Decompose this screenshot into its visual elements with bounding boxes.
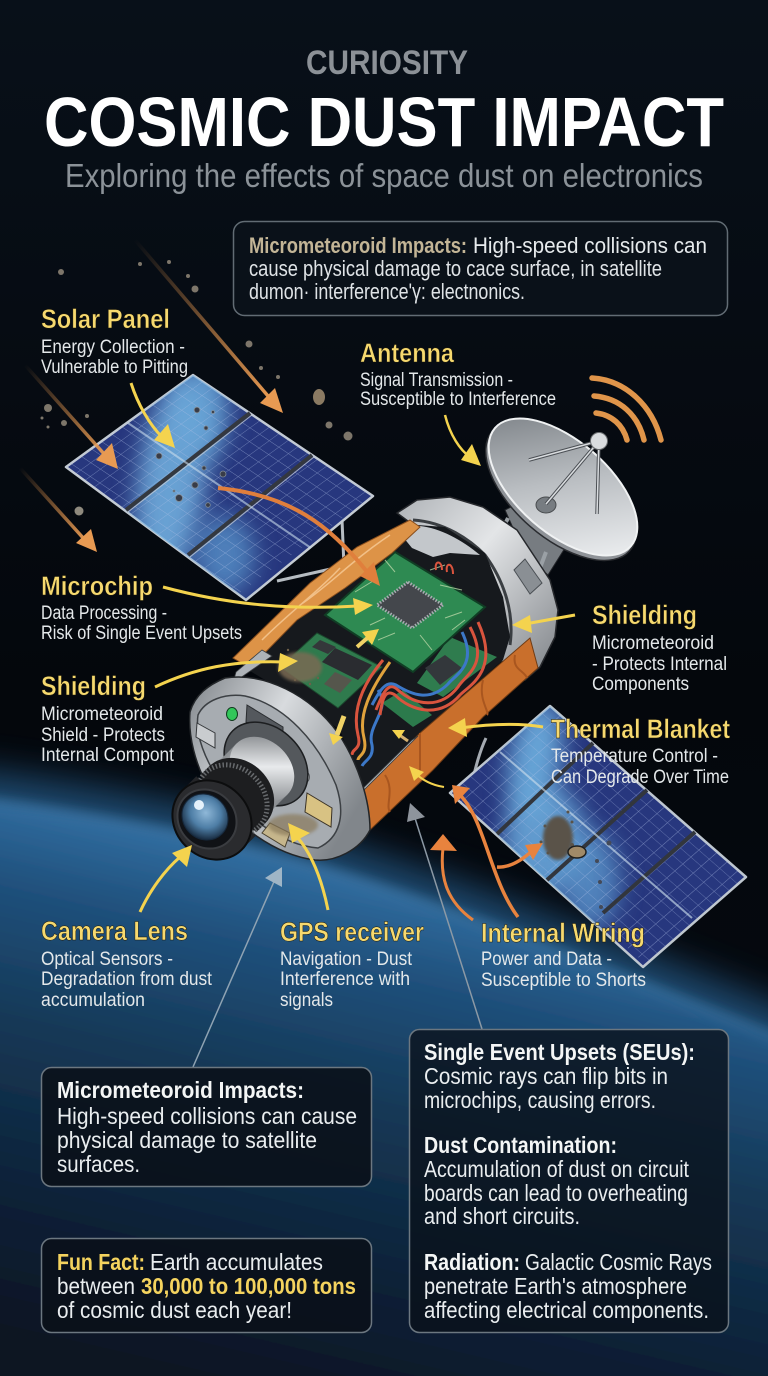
- label: shielding right: Micrometeoroid: [592, 633, 714, 654]
- text: radiation: affecting electrical components.: [424, 1297, 709, 1323]
- arrows: internal wiring: [430, 785, 543, 920]
- thermal blanket: lower panel: [363, 638, 538, 830]
- solar panel: lower right: [450, 696, 746, 967]
- label: gps receiver: Navigation - Dust: [280, 949, 413, 970]
- top callout: micrometeoroid impacts: cause physical damage to cace surface, in satellite: [249, 256, 662, 281]
- label: shielding left: Shielding: [41, 671, 146, 701]
- label: internal wiring: Power and Data -: [481, 949, 612, 970]
- label: antenna: Signal Transmission -: [360, 370, 513, 391]
- subtitle: Exploring the effects of space dust on electronics: [65, 157, 703, 194]
- hatch on ring: [514, 559, 542, 594]
- top callout: micrometeoroid impacts: [234, 222, 728, 316]
- label: gps receiver: Interference with: [280, 969, 410, 990]
- label: internal wiring: Internal Wiring: [481, 918, 645, 948]
- front ring: [190, 677, 370, 860]
- label: thermal blanket: Temperature Control -: [551, 746, 718, 767]
- text: single event upsets: Cosmic rays can flip bits in: [424, 1063, 668, 1089]
- arrow: micrometeoroid box pointer: [193, 867, 282, 1067]
- text: single event upsets: microchips, causing errors.: [424, 1087, 656, 1113]
- rear silver ring: [397, 497, 558, 680]
- metal lip at top of opening: [403, 526, 480, 557]
- metal lip at blanket start: [233, 650, 272, 683]
- text: radiation: [424, 1249, 712, 1323]
- top callout: micrometeoroid impacts: dumon· interference'γ: electnonics.: [249, 279, 525, 304]
- panel: micrometeoroid impacts: surfaces.: [57, 1151, 140, 1177]
- label: antenna: Antenna: [360, 338, 455, 368]
- dust accumulation: [540, 810, 612, 909]
- label: internal wiring: Susceptible to Shorts: [481, 970, 646, 991]
- microchip: [377, 582, 443, 628]
- arrow: solar panel: [131, 383, 175, 448]
- arrow: right box pointer: [407, 803, 482, 1029]
- arrow: shielding left: [155, 653, 298, 687]
- text: radiation: Galactic Cosmic Rays: [525, 1249, 712, 1275]
- silver strip at blanket end: [346, 736, 418, 805]
- face plate: [246, 705, 283, 745]
- arrow: debris diagonal 1: [135, 240, 283, 413]
- main circuit board: [325, 552, 485, 672]
- label: gps receiver: [280, 917, 424, 1011]
- label: antenna: Susceptible to Interference: [360, 389, 556, 410]
- label: solar panel: [41, 304, 188, 378]
- panel: micrometeoroid impacts: Micrometeoroid Impacts:: [57, 1077, 304, 1103]
- gps receiver plate with dust: [262, 823, 290, 847]
- label: camera lens: accumulation: [41, 990, 145, 1011]
- label: microchip: Risk of Single Event Upsets: [41, 623, 242, 644]
- text: single event upsets: [424, 1039, 695, 1113]
- panel: micrometeoroid impacts: physical damage to satellite: [57, 1127, 317, 1153]
- label: solar panel: Solar Panel: [41, 304, 170, 334]
- label: thermal blanket: [551, 714, 730, 788]
- label: antenna: [360, 338, 556, 410]
- panel: fun fact: [42, 1238, 372, 1332]
- panel: fun fact: Earth accumulates: [150, 1249, 323, 1275]
- lower circuit board with dust: [280, 633, 382, 708]
- small inner arrows: [329, 629, 444, 787]
- text: radiation: penetrate Earth's atmosphere: [424, 1273, 687, 1299]
- label: shielding right: Components: [592, 674, 689, 695]
- text: dust contamination: Accumulation of dust on circuit: [424, 1156, 689, 1182]
- top callout: micrometeoroid impacts: High-speed collisions can: [473, 233, 707, 258]
- arrow: solar dust path to chip: [218, 488, 380, 586]
- label: camera lens: Degradation from dust: [41, 969, 213, 990]
- antenna dish: [461, 378, 661, 586]
- interior opening: [245, 525, 510, 790]
- panel: fun fact: Fun Fact:: [57, 1249, 145, 1275]
- text: dust contamination: boards can lead to overheating: [424, 1180, 688, 1206]
- label: gps receiver: signals: [280, 990, 333, 1011]
- title block: [44, 44, 724, 194]
- text: radiation: Radiation:: [424, 1249, 520, 1275]
- label: solar panel: Vulnerable to Pitting: [41, 357, 188, 378]
- background: earth limb glow: [0, 798, 768, 1376]
- panel: micrometeoroid impacts: High-speed collisions can cause: [57, 1103, 357, 1129]
- text: dust contamination: and short circuits.: [424, 1203, 580, 1229]
- signal waves: [592, 378, 661, 440]
- label: shielding left: Micrometeoroid: [41, 704, 163, 725]
- label: solar panel: Energy Collection -: [41, 337, 185, 358]
- impact pits: [156, 407, 226, 507]
- front face: [197, 695, 341, 848]
- panel: seu, dust contamination, radiation: [410, 1030, 728, 1332]
- antenna mount: [505, 495, 570, 575]
- status led: [226, 708, 238, 720]
- title: curiosity: CURIOSITY: [306, 44, 468, 82]
- label: shielding left: Internal Compont: [41, 745, 175, 766]
- arrow: debris diagonal 2: [25, 365, 118, 469]
- text: single event upsets: Single Event Upsets (SEUs):: [424, 1039, 695, 1065]
- label: microchip: Microchip: [41, 571, 153, 601]
- satellite body: [156, 497, 558, 876]
- rear small boards: [417, 637, 497, 697]
- label: shielding right: - Protects Internal: [592, 654, 727, 675]
- label: thermal blanket: Can Degrade Over Time: [551, 767, 729, 788]
- arrow: debris diagonal 3: [20, 468, 97, 552]
- panel: fun fact: of cosmic dust each year!: [57, 1297, 292, 1323]
- arrow: camera lens: [140, 845, 192, 912]
- rear ring inner edge: [413, 520, 511, 645]
- panel support struts: [277, 520, 344, 581]
- panel: fun fact: between: [57, 1273, 135, 1299]
- camera lens: [156, 705, 325, 876]
- label: microchip: Data Processing -: [41, 603, 167, 624]
- label: thermal blanket: Thermal Blanket: [551, 714, 730, 744]
- panel: fun fact: 30,000 to 100,000 tons: [141, 1273, 356, 1299]
- thermal blanket: top strip: [233, 520, 420, 668]
- text: dust contamination: Dust Contamination:: [424, 1132, 617, 1158]
- space dust particles: [40, 260, 352, 516]
- panel: micrometeoroid impacts: [42, 1068, 372, 1186]
- arrow: antenna: [445, 415, 481, 466]
- label: gps receiver: GPS receiver: [280, 917, 424, 947]
- arrow: shielding right: [512, 615, 575, 633]
- arrow: microchip: [163, 587, 373, 615]
- label: internal wiring: [481, 918, 646, 991]
- label: camera lens: Optical Sensors -: [41, 949, 173, 970]
- top callout: micrometeoroid impacts: Micrometeoroid Impacts:: [249, 233, 467, 258]
- arrow: thermal blanket: [448, 718, 543, 737]
- label: shielding right: [592, 600, 727, 695]
- wires: [352, 562, 486, 766]
- label: shielding left: [41, 671, 175, 766]
- label: camera lens: Camera Lens: [41, 916, 188, 946]
- label: shielding left: Shield - Protects: [41, 725, 165, 746]
- text: dust contamination: [424, 1132, 689, 1229]
- label: camera lens: [41, 916, 213, 1011]
- label: shielding right: Shielding: [592, 600, 697, 630]
- solar panel: upper left: [64, 374, 374, 602]
- label: microchip: [41, 571, 242, 644]
- arrow: gps receiver: [288, 823, 328, 910]
